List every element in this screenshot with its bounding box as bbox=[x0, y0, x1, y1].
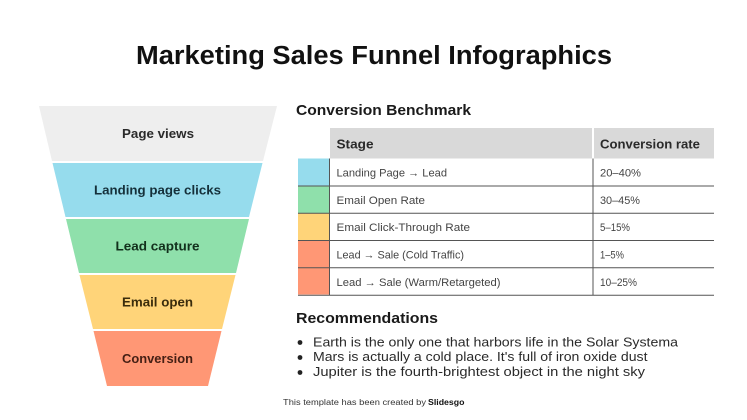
table header bbox=[330, 128, 714, 158]
table rows bbox=[336, 168, 641, 289]
funnel segment: page views: Page views bbox=[122, 126, 194, 141]
row: landing page to lead bbox=[336, 168, 641, 180]
funnel segment: page views bbox=[39, 106, 277, 161]
funnel segment: conversion: Conversion bbox=[122, 351, 193, 366]
funnel segment: email open: Email open bbox=[122, 294, 193, 310]
row: cold traffic bbox=[336, 250, 624, 262]
funnel segment: lead capture bbox=[66, 219, 249, 273]
row: landing page to lead: 20–40% bbox=[600, 168, 641, 180]
row: email open rate: Email Open Rate bbox=[336, 195, 425, 207]
row: email click-through rate: Email Click-Through Rate bbox=[336, 222, 470, 234]
heading: conversion benchmark: Conversion Benchmark bbox=[296, 102, 472, 119]
row: email open rate: 30–45% bbox=[600, 195, 640, 207]
funnel segment: lead capture: Lead capture bbox=[116, 238, 200, 254]
bullet: mars: Mars is actually a cold place. It's full of iron oxide dust bbox=[313, 349, 648, 364]
row: email click-through rate: 5–15% bbox=[600, 222, 630, 234]
row: email click-through rate bbox=[336, 222, 630, 234]
table header: Conversion rate bbox=[600, 136, 700, 152]
funnel segment: conversion bbox=[94, 331, 222, 386]
bullet: earth: Earth is the only one that harbors life in the Solar Systema bbox=[313, 334, 679, 350]
footer credit bbox=[283, 398, 465, 407]
row: landing page to lead: Landing Page → Lead bbox=[336, 168, 447, 180]
footer credit: This template has been created by bbox=[283, 398, 426, 407]
table grid lines bbox=[298, 158, 714, 296]
funnel chart bbox=[39, 106, 277, 386]
row: cold traffic: Lead → Sale (Cold Traffic) bbox=[336, 250, 464, 262]
row: warm traffic: Lead → Sale (Warm/Retargeted) bbox=[336, 277, 500, 289]
row: email open rate bbox=[336, 195, 640, 207]
title: Marketing Sales Funnel Infographics bbox=[136, 42, 612, 70]
recommendations list bbox=[298, 334, 679, 379]
row: warm traffic: 10–25% bbox=[600, 277, 637, 289]
funnel segment: email open bbox=[80, 275, 236, 329]
bullet: jupiter: Jupiter is the fourth-brightest object in the night sky bbox=[313, 364, 646, 379]
row: warm traffic bbox=[336, 277, 637, 289]
colour swatches bbox=[298, 158, 329, 294]
funnel segment: landing page clicks bbox=[52, 163, 262, 217]
funnel segment: landing page clicks: Landing page clicks bbox=[94, 182, 221, 198]
table header: Stage bbox=[336, 136, 374, 152]
footer credit: Slidesgo bbox=[428, 398, 465, 407]
heading: recommendations: Recommendations bbox=[296, 310, 438, 327]
benchmark table bbox=[298, 128, 714, 296]
row: cold traffic: 1–5% bbox=[600, 250, 624, 262]
